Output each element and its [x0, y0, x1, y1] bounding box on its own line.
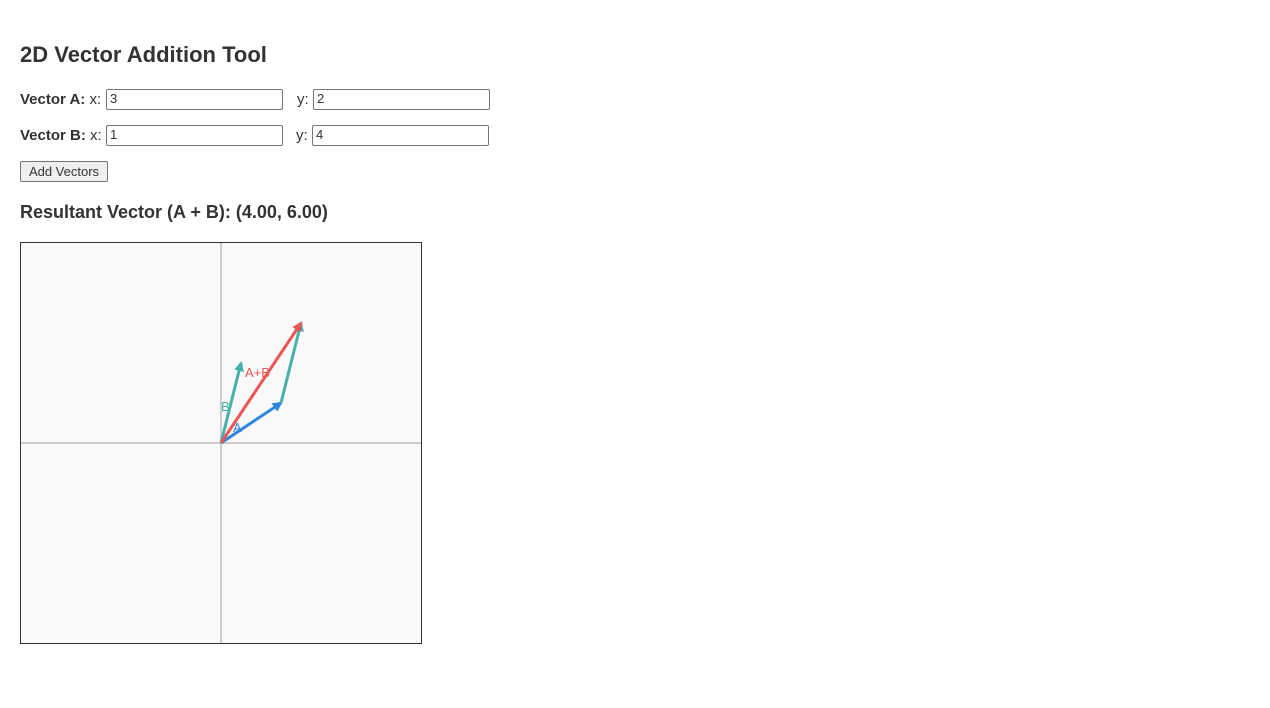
- label: Vector A: Vector A: x:: [20, 91, 101, 108]
- label: B y: y:: [296, 127, 308, 144]
- button: Add Vectors: [20, 161, 108, 182]
- row: vector A inputs: [20, 89, 490, 110]
- title: 2D Vector Addition Tool: [20, 42, 267, 67]
- vector B: B: [221, 399, 230, 414]
- vector A: [221, 403, 281, 443]
- label: A y: y:: [297, 91, 309, 108]
- input: B x: 1: [110, 127, 117, 142]
- input: A y: 2: [317, 91, 324, 106]
- vector B: [221, 323, 301, 443]
- chart: vector canvas: [20, 242, 422, 644]
- vector A+B: A+B: [245, 365, 270, 380]
- input: A x: [106, 89, 283, 110]
- input: B x: [106, 125, 283, 146]
- label: Vector B: Vector B: x:: [20, 127, 102, 144]
- input: B y: 4: [316, 127, 323, 142]
- row: vector B inputs: [20, 125, 489, 146]
- vector A+B: [221, 323, 301, 443]
- vector A: A: [233, 420, 242, 435]
- button: Add Vectors: Add Vectors: [29, 164, 99, 179]
- input: B y: [312, 125, 489, 146]
- input: A x: 3: [110, 91, 117, 106]
- result heading: Resultant Vector (A + B): (4.00, 6.00): [20, 202, 328, 222]
- input: A y: [313, 89, 490, 110]
